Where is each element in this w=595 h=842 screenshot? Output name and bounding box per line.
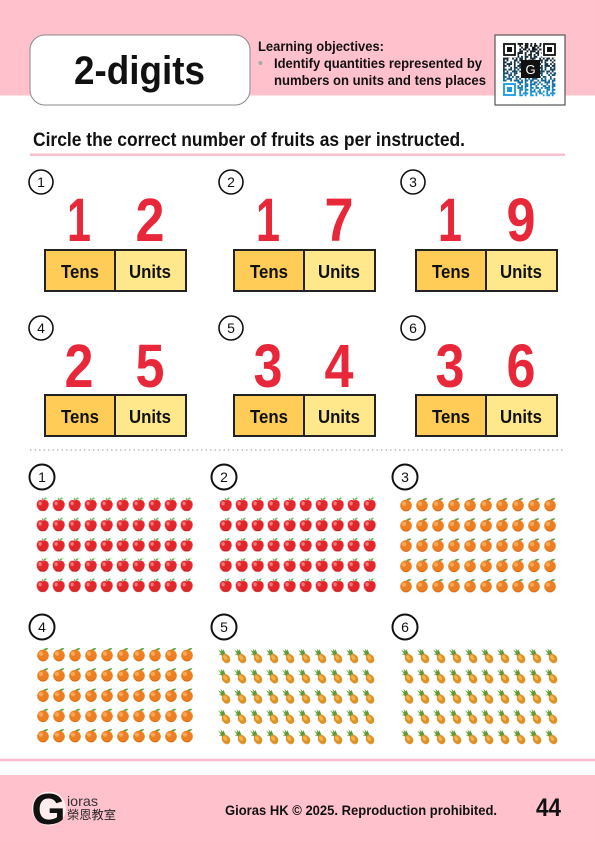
number card 3 (401, 170, 557, 291)
fruit panel 5: pineapples (212, 614, 376, 747)
logo: 榮恩教室 (67, 807, 116, 822)
header band (0, 0, 595, 96)
number card 6: 3 (436, 332, 464, 400)
page number: 44 (536, 794, 561, 822)
number card 1: Tens (61, 262, 99, 282)
logo: G (32, 785, 66, 834)
number card 6 (401, 316, 557, 436)
number card 1 (29, 170, 186, 291)
number card 5 (219, 316, 375, 436)
fruit panel 4: oranges: 4 (38, 619, 46, 635)
title box: 2-digits (74, 49, 205, 93)
QR code: G (525, 62, 536, 77)
fruit panel 4: oranges (30, 614, 195, 746)
number card 5: Units (318, 407, 360, 427)
number card 1: Units (129, 262, 171, 282)
fruit panel 6: pineapples (392, 614, 559, 747)
number card 4: 4 (37, 320, 45, 336)
fruit panel 3: oranges: 3 (401, 469, 409, 485)
learning objectives: numbers on units and tens places (274, 73, 486, 88)
number card 6: 6 (506, 332, 536, 400)
fruit panel 3: oranges (392, 464, 558, 596)
number card 2: 2 (227, 174, 235, 190)
number card 4: 5 (136, 332, 164, 400)
number card 2 (219, 170, 375, 291)
instruction heading: Circle the correct number of fruits as per instructed. (33, 130, 465, 151)
number card 5: 5 (227, 320, 235, 336)
learning objectives (258, 39, 486, 88)
number card 4: Tens (61, 407, 99, 427)
fruit panel 6: pineapples: 6 (401, 619, 409, 635)
fruit panel 1: apples: 1 (38, 469, 46, 485)
number card 6: Units (500, 407, 542, 427)
number card 3: 3 (409, 174, 417, 190)
number card 3: 1 (438, 186, 462, 254)
number card 2: 1 (256, 186, 280, 254)
number card 2: 7 (324, 186, 354, 254)
fruit panel 2: apples: 2 (220, 469, 228, 485)
number card 4: Units (129, 407, 171, 427)
number card 2: Tens (250, 262, 288, 282)
learning objectives: Identify quantities represented by (274, 56, 482, 71)
logo (32, 785, 116, 834)
number card 4: 2 (64, 332, 94, 400)
number card 5: 3 (254, 332, 282, 400)
number card 6: Tens (432, 407, 470, 427)
number card 5: Tens (250, 407, 288, 427)
footer band (0, 775, 595, 842)
fruit panel 5: pineapples: 5 (220, 619, 228, 635)
learning objectives: Learning objectives: (258, 39, 384, 54)
number card 1: 1 (67, 186, 91, 254)
number card 4 (29, 316, 186, 436)
copyright: Gioras HK © 2025. Reproduction prohibited. (225, 802, 497, 818)
number card 1: 2 (136, 186, 164, 254)
fruit panel 1: apples (30, 464, 195, 596)
number card 3: Units (500, 262, 542, 282)
QR code (495, 35, 565, 105)
number card 3: 9 (506, 186, 536, 254)
fruit panel 2: apples (212, 464, 378, 596)
title box (30, 35, 250, 105)
logo: ioras (67, 793, 98, 809)
number card 2: Units (318, 262, 360, 282)
number card 5: 4 (324, 332, 354, 400)
number card 6: 6 (409, 320, 417, 336)
number card 3: Tens (432, 262, 470, 282)
number card 1: 1 (37, 174, 45, 190)
